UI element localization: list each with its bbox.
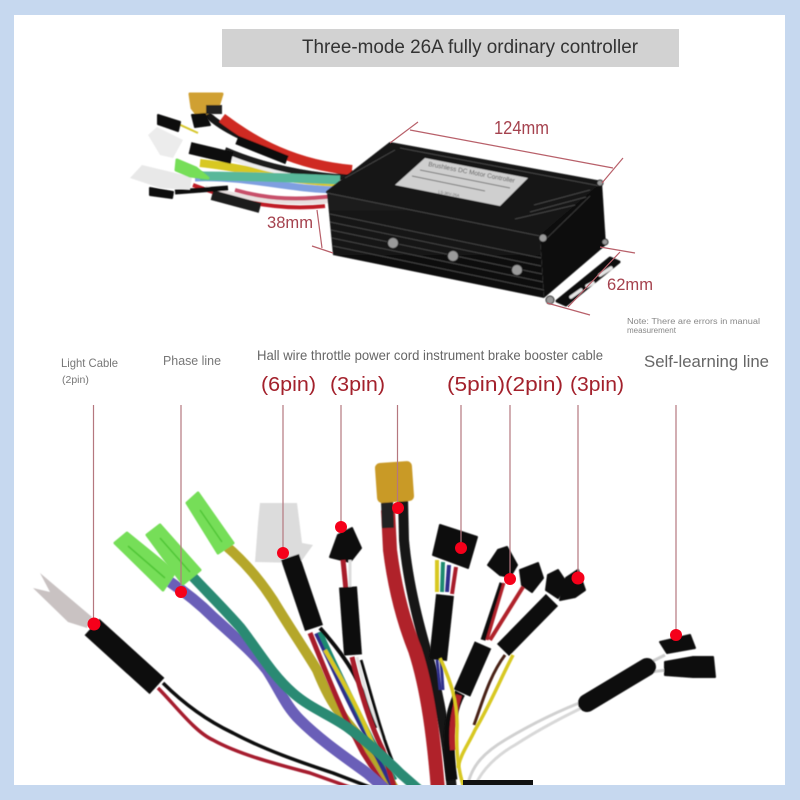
screws bbox=[388, 180, 608, 304]
pin counts: (3pin) bbox=[330, 374, 385, 396]
pin counts: (3pin) bbox=[570, 374, 624, 396]
power cable with XT60 connector bbox=[375, 461, 452, 790]
label: self-learning line: Self-learning line bbox=[644, 352, 769, 371]
phase wire: yellow bbox=[187, 493, 395, 790]
light cable assembly bbox=[33, 573, 372, 788]
title bar: Three-mode 26A fully ordinary controller bbox=[302, 36, 638, 58]
label: light cable: (2pin) bbox=[62, 374, 89, 386]
product label: LS-36V-26A bbox=[438, 189, 460, 198]
dimension: height 38mm: 38mm bbox=[267, 213, 313, 232]
dimension: width 62mm bbox=[547, 247, 653, 315]
leader line and dot: 5pin bbox=[455, 405, 467, 554]
measurement note: measurement bbox=[627, 326, 677, 335]
mounting bracket bbox=[557, 258, 619, 305]
product label: Brushless DC Motor Controller bbox=[428, 161, 516, 185]
yellow wire from 5pin connector bbox=[440, 658, 464, 788]
measurement note: Note: There are errors in manual bbox=[627, 317, 760, 326]
dimension: height 38mm bbox=[267, 210, 333, 253]
3pin connector bbox=[330, 528, 361, 655]
label: light cable: Light Cable bbox=[61, 356, 118, 370]
controller cable bundle bbox=[165, 112, 352, 208]
leader line and dot: self-learning bbox=[670, 405, 682, 641]
leader line and dot: 2pin bbox=[504, 405, 516, 585]
leader line and dot: light cable bbox=[88, 405, 100, 630]
leader line and dot: phase line bbox=[175, 405, 187, 598]
dimension: length 124mm: 124mm bbox=[494, 118, 549, 138]
other wires of the harness bbox=[310, 628, 395, 795]
phase wire: teal bbox=[147, 525, 425, 795]
2pin connectors bbox=[449, 547, 543, 780]
label: phase line: Phase line bbox=[163, 353, 221, 368]
product label bbox=[395, 158, 528, 206]
leader line and dot: 6pin bbox=[277, 405, 289, 559]
label: connector group: Hall wire throttle power cord instrument brake booster cable bbox=[257, 347, 603, 363]
housing ridges bbox=[327, 148, 600, 290]
controller housing bbox=[327, 143, 608, 304]
pin counts: (5pin)(2pin) bbox=[447, 374, 563, 396]
6pin connector bbox=[255, 503, 314, 628]
5pin connector bbox=[433, 525, 477, 690]
dimension: width 62mm: 62mm bbox=[607, 275, 653, 294]
leader line and dot: power cord bbox=[392, 405, 404, 514]
leader line and dot: 3pin bbox=[335, 405, 347, 533]
pin counts bbox=[261, 374, 624, 396]
right 3pin connector bbox=[458, 570, 585, 768]
connectors on controller cables bbox=[130, 94, 222, 198]
phase wire: purple bbox=[115, 533, 392, 795]
dimension: length 124mm bbox=[390, 118, 623, 183]
self-learning connectors bbox=[468, 635, 715, 784]
title bar bbox=[222, 29, 679, 67]
pin counts: (6pin) bbox=[261, 374, 316, 396]
base strip bbox=[463, 780, 533, 785]
leader line and dot: right 3pin bbox=[572, 405, 584, 584]
